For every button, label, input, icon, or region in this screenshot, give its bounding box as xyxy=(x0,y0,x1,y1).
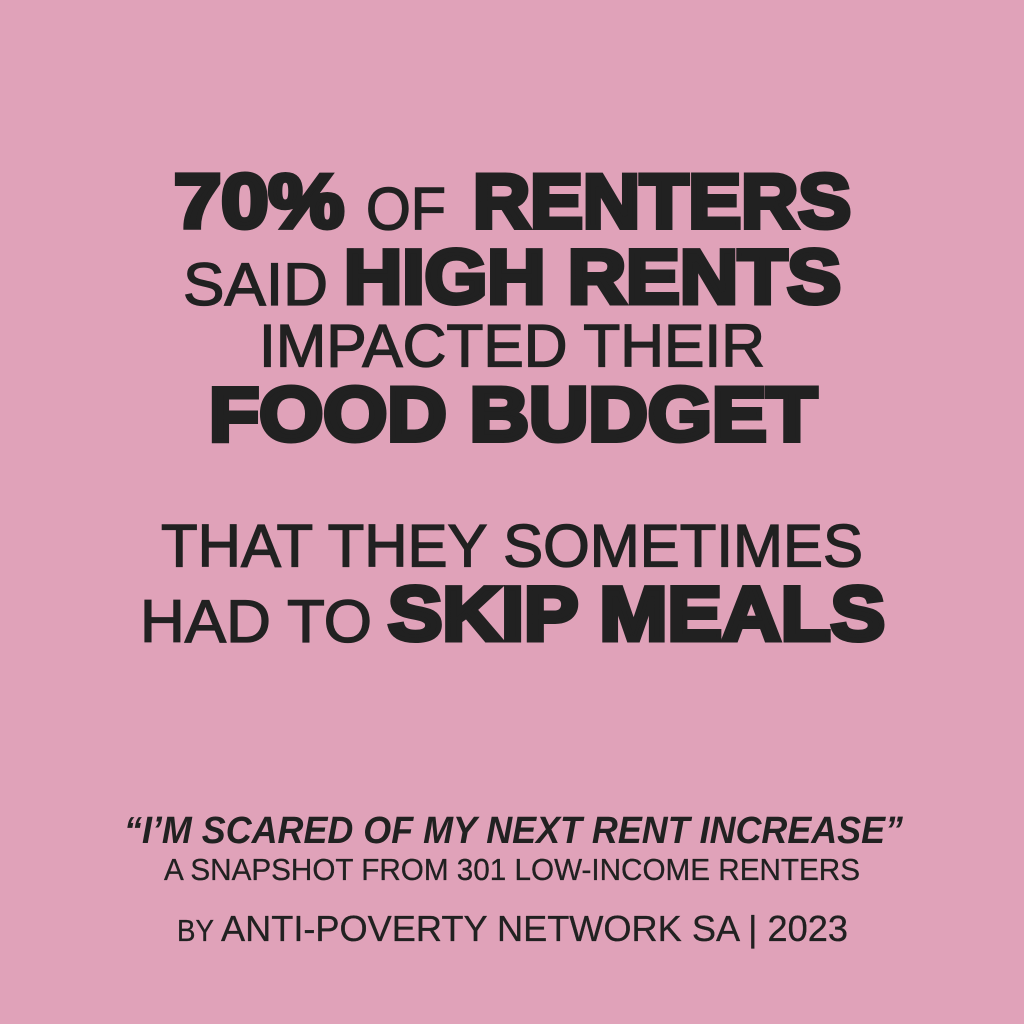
report title quote: “I’M SCARED OF MY NEXT RENT INCREASE” xyxy=(124,810,903,852)
line: impacted their: IMPACTED THEIR xyxy=(259,312,765,380)
line: food budget: FOOD BUDGET xyxy=(209,372,817,458)
line: had to skip meals xyxy=(140,572,885,657)
line: 70% of renters xyxy=(174,160,851,244)
line: had to skip meals: HAD TO xyxy=(140,588,372,655)
line: 70% of renters: OF xyxy=(366,176,446,242)
heading: renters statistic xyxy=(174,160,851,458)
attribution: BY xyxy=(177,914,214,948)
line: that they sometimes: THAT THEY SOMETIMES xyxy=(161,512,863,580)
attribution: ANTI-POVERTY NETWORK SA | 2023 xyxy=(221,908,848,949)
line: said high rents: HIGH RENTS xyxy=(344,235,841,320)
report subtitle: A SNAPSHOT FROM 301 LOW-INCOME RENTERS xyxy=(164,853,860,887)
line: said high rents: SAID xyxy=(183,251,328,318)
line: 70% of renters: 70% xyxy=(174,160,344,244)
line: 70% of renters: RENTERS xyxy=(473,160,851,244)
heading: skipping meals xyxy=(140,512,885,657)
line: had to skip meals: SKIP MEALS xyxy=(388,572,885,657)
